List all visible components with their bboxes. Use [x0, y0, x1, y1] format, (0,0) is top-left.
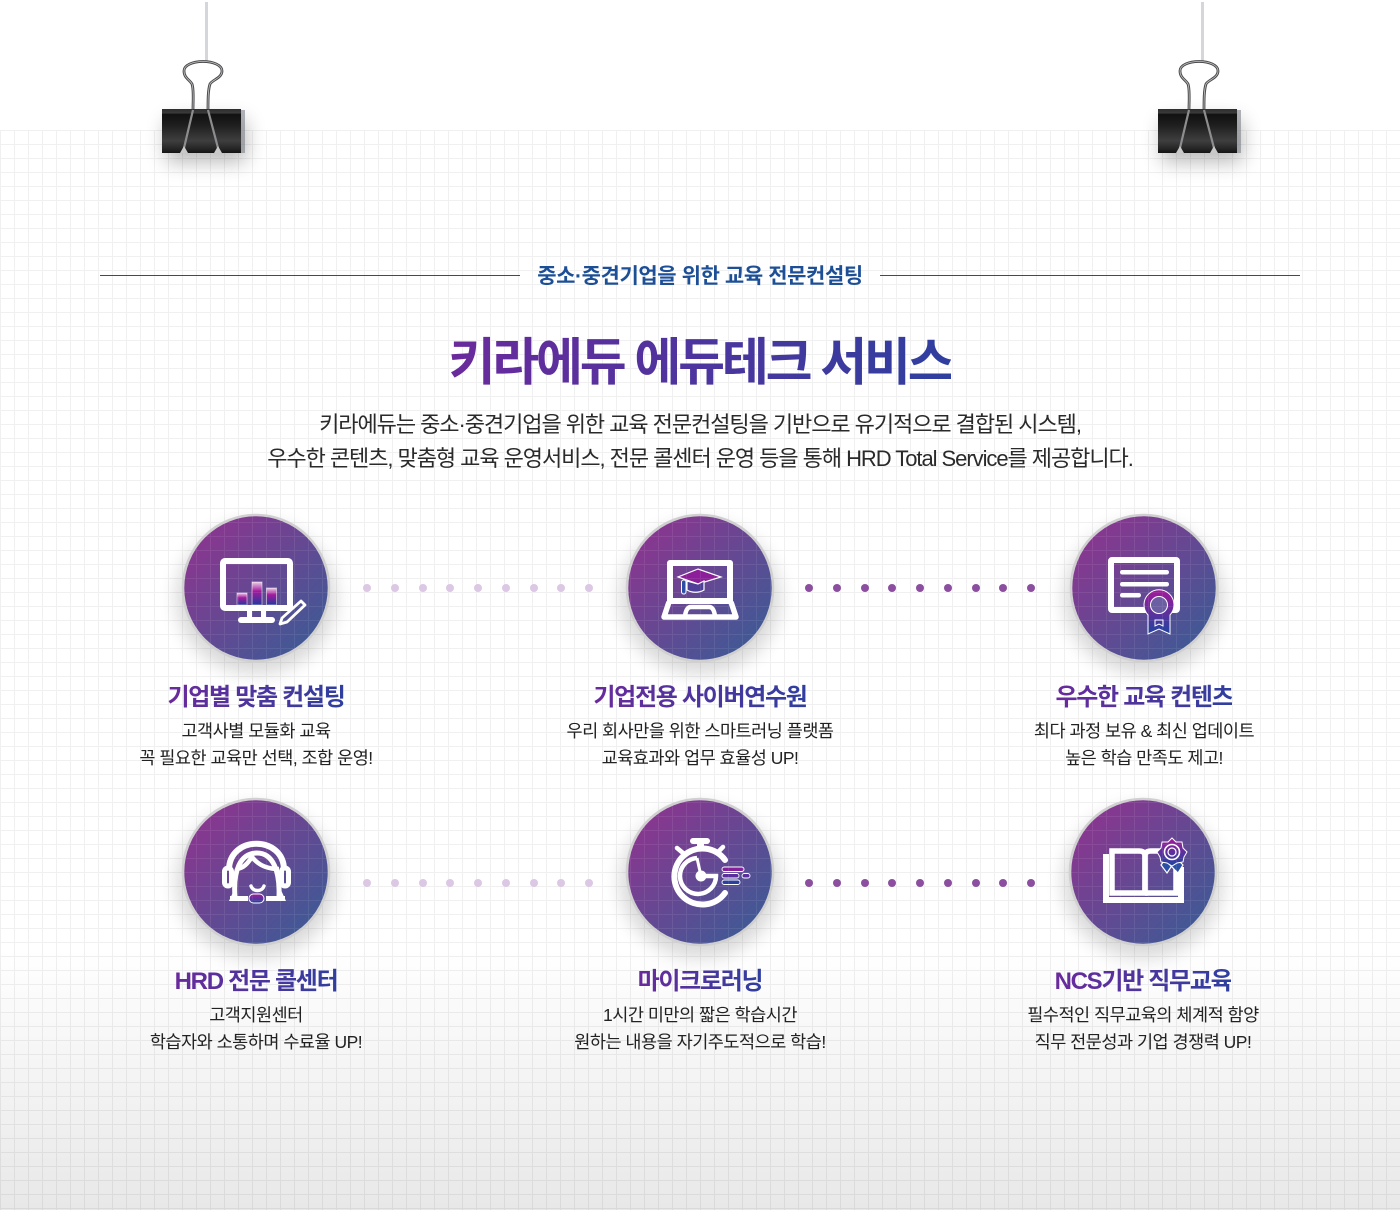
- intro paragraph: 우수한 콘텐츠, 맞춤형 교육 운영서비스, 전문 콜센터 운영 등을 통해 HRD Total Service를 제공합니다.: [267, 446, 1133, 471]
- subtitle: 중소·중견기업을 위한 교육 전문컨설팅: [537, 265, 863, 288]
- text: quality content: 높은 학습 만족도 제고!: [1065, 748, 1223, 768]
- icon: laptop with graduation cap: [664, 563, 736, 617]
- heading: microlearning: 마이크로러닝: [638, 968, 762, 995]
- icon: headset agent: [224, 844, 288, 903]
- text: cyber training: 교육효과와 업무 효율성 UP!: [602, 748, 798, 768]
- circle: cyber training: [620, 515, 780, 674]
- text: microlearning: 원하는 내용을 자기주도적으로 학습!: [574, 1032, 826, 1052]
- icon: monitor with bar chart: [223, 561, 305, 624]
- circle: corporate consulting: [176, 515, 336, 674]
- text: HRD call center: [150, 1005, 362, 1052]
- icon: open book with award: [1106, 838, 1187, 900]
- connector dots: row 1 left: [363, 584, 593, 592]
- subtitle rule left: [100, 275, 520, 276]
- main title: 키라에듀 에듀테크 서비스: [449, 334, 951, 391]
- intro paragraph: [267, 412, 1133, 471]
- circle: microlearning: [620, 799, 780, 958]
- circle: NCS job training: [1063, 799, 1223, 958]
- text: corporate consulting: [139, 721, 373, 768]
- icon: stopwatch: [674, 838, 750, 904]
- intro paragraph: 키라에듀는 중소·중견기업을 위한 교육 전문컨설팅을 기반으로 유기적으로 결합된 시스템,: [319, 412, 1081, 437]
- icon: certificate with ribbon: [1111, 560, 1177, 634]
- text: NCS job training: 직무 전문성과 기업 경쟁력 UP!: [1035, 1032, 1251, 1052]
- connector dots: row 2 left: [363, 879, 593, 887]
- text: quality content: 최다 과정 보유 & 최신 업데이트: [1034, 721, 1254, 741]
- heading: cyber training: 기업전용 사이버연수원: [593, 684, 807, 711]
- circle: HRD call center: [176, 799, 336, 958]
- icon: right binder clip: [1158, 2, 1242, 162]
- connector dots: row 1 right: [805, 584, 1035, 592]
- heading: quality content: 우수한 교육 컨텐츠: [1056, 684, 1232, 711]
- text: corporate consulting: 고객사별 모듈화 교육: [181, 721, 331, 741]
- disc grid overlay: [184, 516, 1216, 944]
- subtitle rule right: [880, 275, 1300, 276]
- text: HRD call center: 학습자와 소통하며 수료율 UP!: [150, 1032, 362, 1052]
- text: cyber training: 우리 회사만을 위한 스마트러닝 플랫폼: [566, 721, 834, 741]
- text: cyber training: [566, 721, 834, 768]
- text: corporate consulting: 꼭 필요한 교육만 선택, 조합 운영!: [139, 748, 373, 768]
- heading: HRD call center: HRD 전문 콜센터: [175, 968, 337, 995]
- text: NCS job training: [1027, 1005, 1259, 1052]
- text: microlearning: [574, 1005, 826, 1052]
- heading: corporate consulting: 기업별 맞춤 컨설팅: [168, 684, 344, 711]
- icon: left binder clip: [162, 2, 246, 162]
- circle: quality content: [1064, 515, 1224, 674]
- text: NCS job training: 필수적인 직무교육의 체계적 함양: [1027, 1005, 1259, 1025]
- text: quality content: [1034, 721, 1254, 768]
- text: HRD call center: 고객지원센터: [209, 1005, 303, 1025]
- connector dots: row 2 right: [805, 879, 1035, 887]
- text: microlearning: 1시간 미만의 짧은 학습시간: [603, 1005, 797, 1025]
- heading: NCS job training: NCS기반 직무교육: [1055, 968, 1231, 995]
